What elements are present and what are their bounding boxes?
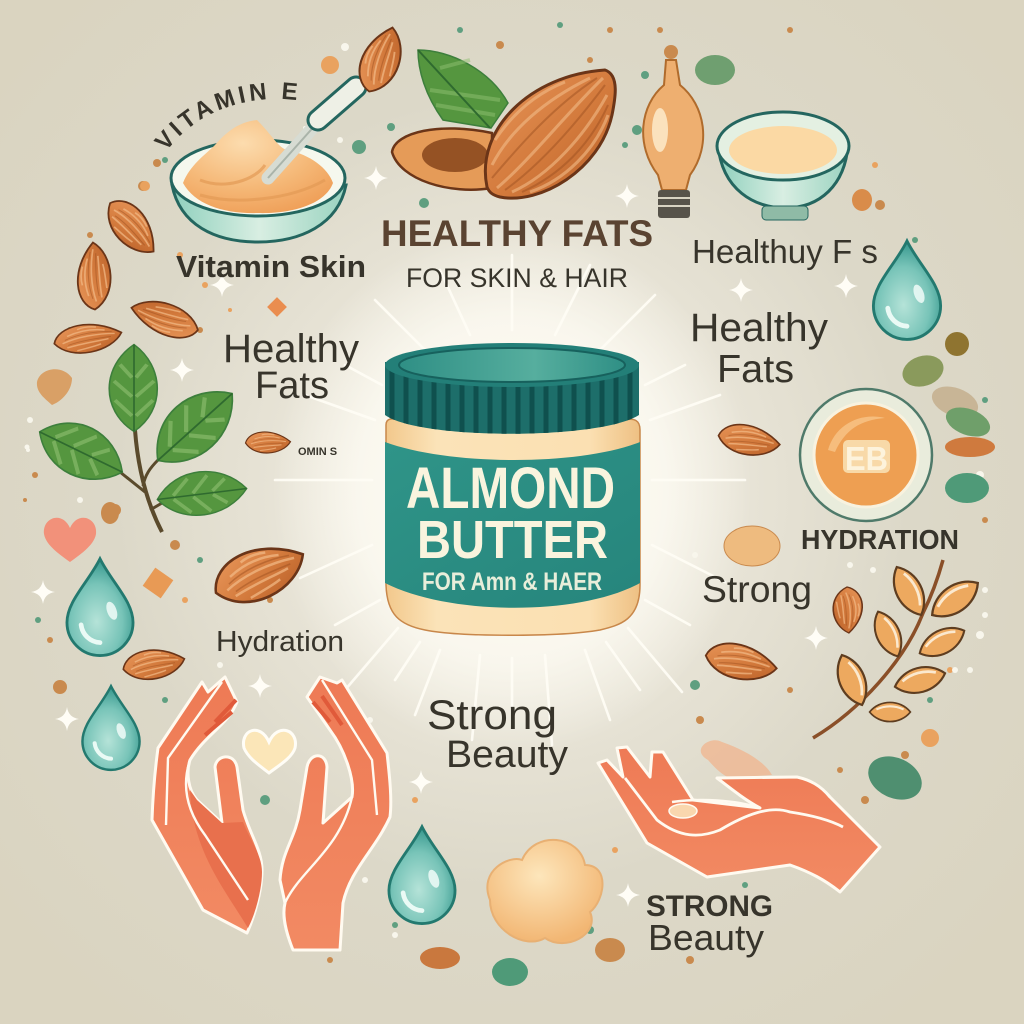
jar label: [385, 442, 640, 608]
heading: vitamin E curved: VITAMIN E: [153, 82, 297, 147]
text: vitamin skin: Vitamin Skin: [176, 249, 366, 284]
text: healthy f s: Healthuy F s: [692, 233, 878, 270]
icon: drop bottom: [389, 827, 455, 924]
text: healthy fats left: [223, 327, 359, 407]
icon: small almond label: [246, 432, 337, 458]
icon: large almond, shell and leaf: [392, 50, 615, 198]
text: healthy fats right: Fats: [717, 348, 794, 391]
almond butter jar: BUTTER: [417, 510, 608, 570]
text: hydration right: HYDRATION: [801, 524, 959, 555]
text: healthy fats left: Fats: [255, 365, 329, 407]
icon: bulb bottle: [643, 45, 703, 218]
icon: left hands with heart: [152, 677, 391, 950]
icon: orange leaf branch: [813, 560, 985, 738]
icon: almond middle left: [206, 533, 313, 614]
jar title: ALMOND: [406, 456, 615, 521]
jar body: [386, 419, 640, 635]
icon: butter dollop: [487, 840, 602, 943]
text: strong right: Strong: [702, 569, 812, 610]
heading: healthy fats: HEALTHY FATS: [381, 213, 653, 254]
icon: drop left: [67, 559, 133, 656]
text: strong beauty center: Strong: [427, 691, 557, 738]
jar lid: [385, 343, 639, 440]
icon: green leaf branch: [29, 344, 249, 532]
text: for skin and hair: FOR SKIN & HAIR: [406, 263, 628, 293]
text: hydration left: Hydration: [216, 626, 344, 658]
icon: vitamin EB capsule: [800, 389, 932, 521]
icon: heart: [44, 518, 96, 562]
text: strong beauty center: Beauty: [446, 734, 568, 776]
text: healthy fats right: [690, 306, 828, 391]
icon: right hand: [598, 740, 880, 892]
icon: bowl of cream with spoon: [171, 87, 356, 242]
sparkles: [31, 166, 858, 907]
icon: drop right: [873, 241, 941, 339]
almond butter jar: [385, 343, 640, 635]
jar subtitle: FOR Amn & HAER: [422, 568, 602, 596]
text: strong beauty bottom: STRONG: [646, 890, 773, 923]
text: healthy fats left: Healthy: [223, 327, 359, 371]
icon: drop lower left: [82, 686, 140, 770]
icon: left almonds: [52, 192, 203, 357]
icon: almond top left: [352, 21, 411, 98]
icon: right almonds: [702, 421, 862, 686]
icon: small bowl: [717, 112, 849, 220]
icon: small almond label: OMIN S: [298, 446, 337, 458]
icon: vitamin EB capsule: EB: [845, 440, 888, 477]
text: strong beauty bottom: [646, 890, 773, 958]
text: healthy fats right: Healthy: [690, 306, 828, 350]
center glow and rays: [272, 225, 752, 755]
icon: almond lower left: [121, 646, 187, 683]
text: strong beauty bottom: Beauty: [648, 917, 764, 958]
text: strong beauty center: [427, 691, 568, 776]
